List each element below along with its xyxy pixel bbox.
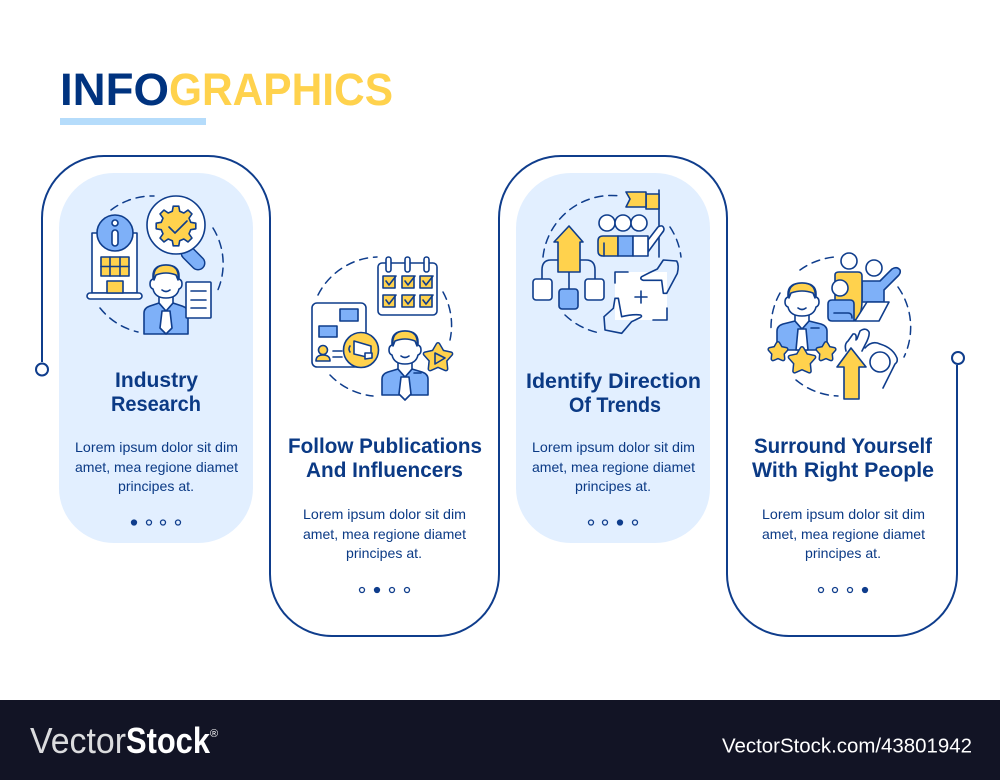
text block 3 (532, 439, 695, 494)
heading: surround yourself (752, 435, 934, 482)
panel backgrounds: card 1 (59, 173, 253, 543)
document (186, 282, 211, 318)
text block 1: Lorem ipsum dolor sit dim (75, 439, 238, 455)
pagination dots 3 (588, 520, 638, 525)
heading: industry research (111, 369, 201, 416)
profile card (312, 303, 366, 367)
panel backgrounds: card 3 (516, 173, 710, 543)
heading: follow publications: Follow Publications (288, 435, 482, 458)
heading: identify direction of trends: Identify Direction (526, 370, 701, 393)
heading: follow publications (288, 435, 482, 482)
magnifier with gear (147, 196, 205, 263)
heading: identify direction of trends (526, 370, 701, 417)
pagination dots 2 (360, 588, 410, 592)
title: GRAPHICS (169, 64, 393, 115)
text block 2: amet, mea regione diamet (303, 526, 466, 542)
icon: surround yourself with right people (770, 253, 911, 399)
heading: surround yourself: With Right People (752, 459, 934, 482)
text block 3: amet, mea regione diamet (532, 459, 695, 475)
pagination dots 4 (818, 588, 868, 592)
framing hands (604, 260, 678, 333)
text block 4 (762, 506, 925, 561)
text block 2 (303, 506, 466, 561)
title (60, 64, 393, 115)
star with play button (425, 344, 451, 369)
heading: identify direction of trends: Of Trends (569, 394, 661, 417)
text block 4: amet, mea regione diamet (762, 526, 925, 542)
calendar (378, 257, 437, 315)
text block 3: Lorem ipsum dolor sit dim (532, 439, 695, 455)
icon: identify direction of trends (533, 190, 681, 333)
title underline (60, 118, 206, 125)
footer logo: Stock (126, 720, 211, 761)
heading: follow publications: And Influencers (306, 459, 463, 482)
heading: industry research: Industry (115, 369, 198, 392)
text block 3: principes at. (575, 478, 651, 494)
text block 2: principes at. (346, 545, 422, 561)
text block 4: principes at. (805, 545, 881, 561)
connecting outline (36, 156, 964, 636)
text block 1 (75, 439, 238, 494)
heading: surround yourself: Surround Yourself (754, 435, 933, 458)
heading: industry research: Research (111, 393, 201, 416)
team (598, 215, 664, 256)
text block 4: Lorem ipsum dolor sit dim (762, 506, 925, 522)
text block 1: principes at. (118, 478, 194, 494)
footer logo: ® (210, 728, 218, 740)
text block 2: Lorem ipsum dolor sit dim (303, 506, 466, 522)
title: INFO (60, 64, 169, 115)
footer logo: Vector (30, 720, 126, 761)
pagination dots 1 (132, 520, 180, 525)
icon: follow publications (312, 257, 452, 400)
rating stars (770, 344, 834, 371)
footer logo (30, 720, 218, 761)
megaphone badge (344, 332, 378, 368)
person (777, 283, 827, 350)
footer id: VectorStock.com/43801942 (722, 736, 972, 758)
flag (626, 190, 659, 257)
building (87, 215, 142, 299)
icon: industry research (87, 196, 223, 334)
footer bar (0, 700, 1000, 780)
text block 1: amet, mea regione diamet (75, 459, 238, 475)
group of people (828, 253, 900, 321)
person (144, 265, 188, 334)
arrow and tree (533, 226, 604, 309)
person (382, 331, 428, 400)
up arrow and ok hand (837, 329, 897, 399)
